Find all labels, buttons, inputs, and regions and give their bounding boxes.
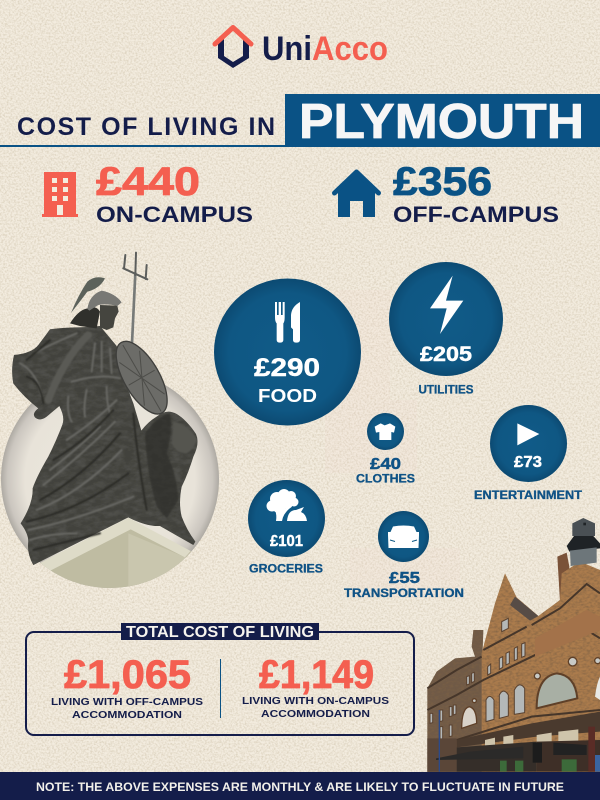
on-campus rent [42, 160, 253, 227]
on-campus total: ACCOMMODATION [261, 708, 370, 720]
clothes amount: £40 [370, 456, 401, 473]
transportation amount: £55 [389, 570, 420, 587]
lighter drapery folds [20, 333, 133, 540]
icon: car [388, 526, 419, 548]
entertainment label: ENTERTAINMENT [474, 490, 582, 502]
icon: fork and knife [275, 302, 300, 343]
on-campus amount: £440 [96, 160, 200, 204]
icon: t-shirt [375, 423, 395, 440]
shopfront fascia [457, 712, 600, 747]
groceries amount: £101 [270, 533, 303, 550]
left wing [427, 630, 483, 773]
on-campus total [242, 653, 389, 720]
utilities label: UTILITIES [418, 384, 474, 396]
panel heading: TOTAL COST OF LIVING [126, 624, 314, 641]
utilities amount: £205 [420, 343, 472, 366]
icon: lightning bolt [430, 276, 463, 334]
off-campus total: £1,065 [64, 653, 191, 697]
upper wall panel [535, 610, 600, 657]
icon: broccoli and apple [266, 489, 307, 521]
on-campus label: ON-CAMPUS [96, 202, 253, 227]
dark drapery creases [27, 340, 147, 550]
lion mane shading [145, 413, 178, 518]
title banner [285, 94, 600, 147]
trident shaft and head [123, 253, 147, 512]
arched windows [430, 618, 525, 740]
clothes label: CLOTHES [356, 474, 415, 486]
panel divider [220, 659, 221, 718]
logo wordmark: UniAcco [262, 30, 388, 68]
icon: apartment building [42, 172, 78, 217]
food amount: £290 [254, 354, 320, 382]
footer note [0, 772, 600, 800]
groceries label: GROCERIES [249, 564, 323, 576]
title text: Plymouth: PLYMOUTH [299, 95, 584, 149]
mosaic arch [537, 673, 577, 708]
footer note: NOTE: THE ABOVE EXPENSES ARE MONTHLY & ARE LIKELY TO FLUCTUATE IN FUTURE [36, 780, 564, 794]
gable roof [510, 597, 538, 621]
icon: play [517, 423, 539, 445]
on-campus total: £1,149 [259, 653, 374, 697]
title text: cost of living in: COST OF LIVING IN [17, 113, 275, 141]
logo: UniAcco [215, 28, 388, 68]
title rule [0, 145, 290, 147]
chimney [557, 553, 569, 603]
on-campus total: LIVING WITH ON-CAMPUS [242, 695, 389, 707]
figure silhouette [12, 326, 197, 565]
off-campus total [51, 653, 203, 721]
off-campus rent [334, 160, 559, 227]
food label: FOOD [258, 386, 317, 406]
panel frame [26, 632, 414, 735]
cornice bands [427, 584, 600, 740]
total cost of living panel [26, 623, 414, 735]
shopfront base [427, 738, 457, 772]
groceries bubble [248, 480, 325, 576]
statue backdrop disc [1, 370, 219, 588]
icon: house [334, 172, 378, 217]
title [0, 94, 600, 149]
clothes bubble [356, 413, 415, 486]
entertainment amount: £73 [514, 454, 542, 471]
statue of Britannia [1, 253, 219, 607]
pedestal [40, 518, 191, 588]
utilities bubble [389, 262, 503, 396]
theatre building photo [427, 518, 600, 773]
off-campus total: ACCOMMODATION [72, 709, 182, 721]
transportation bubble [344, 511, 464, 600]
off-campus amount: £356 [393, 160, 492, 204]
tower cupola [567, 518, 600, 566]
entertainment bubble [474, 405, 582, 502]
round windows [472, 657, 600, 703]
lion face [172, 422, 197, 453]
off-campus label: OFF-CAMPUS [393, 202, 559, 227]
building brick body [482, 562, 600, 773]
expense bubbles [214, 262, 582, 600]
food bubble [214, 278, 361, 426]
cream shop panels [485, 729, 578, 747]
icon: house logo [215, 28, 251, 68]
shield [106, 334, 177, 422]
transportation label: TRANSPORTATION [344, 588, 464, 600]
head and helmet [70, 277, 122, 330]
off-campus total: LIVING WITH OFF-CAMPUS [51, 696, 203, 708]
